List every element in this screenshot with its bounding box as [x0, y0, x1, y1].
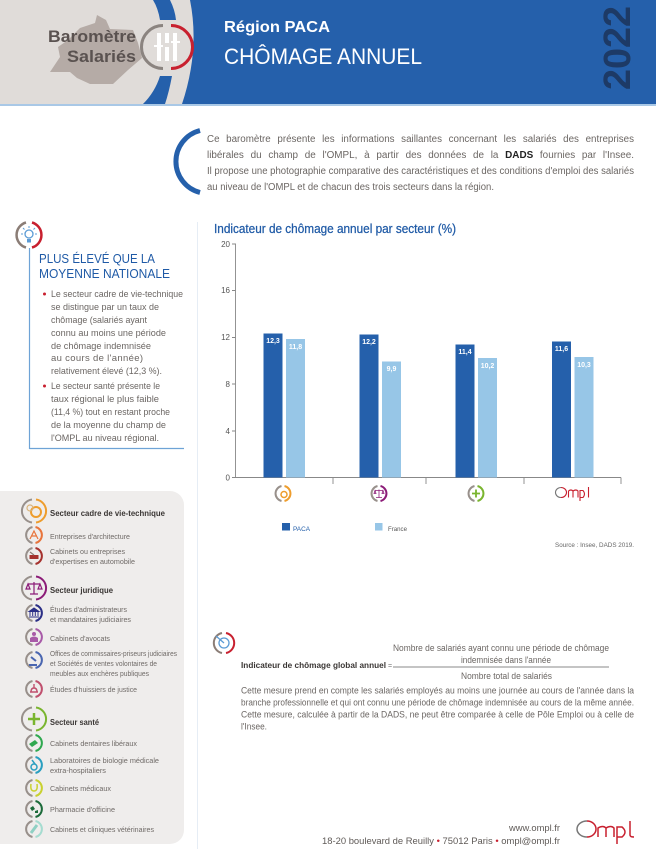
intro arc	[176, 130, 200, 192]
formula: Indicateur de chômage global annuel	[241, 661, 386, 670]
callout bullet list: relativement élevé (12,3 %).	[51, 366, 162, 377]
axes: 0	[226, 474, 231, 482]
icon: light bulb	[17, 222, 41, 248]
formula	[241, 643, 609, 681]
callout bullet list: de chômage indemnisée	[51, 341, 151, 352]
item: laboratoires: extra-hospitaliers	[50, 768, 107, 775]
intro text	[207, 134, 634, 193]
chart legend: PACA	[293, 527, 310, 533]
sector heading: cadre de vie-technique	[22, 500, 165, 522]
callout heading: MOYENNE NATIONALE	[39, 266, 170, 281]
chart legend: France	[388, 527, 408, 533]
item: laboratoires	[26, 757, 159, 775]
axes	[221, 240, 621, 484]
item: commissaires-priseurs	[26, 651, 177, 678]
sector heading: juridique: Secteur juridique	[50, 585, 113, 595]
item: laboratoires: Laboratoires de biologie médicale	[50, 758, 159, 765]
bars: santé: 10,2	[481, 363, 494, 370]
formula: indemnisée dans l'année	[461, 655, 551, 665]
icon: cadre de vie-technique axis	[276, 486, 290, 501]
callout bullet list: de la moyenne du champ de	[51, 420, 166, 431]
item: commissaires-priseurs: meubles aux enchères publiques	[50, 671, 149, 678]
chart legend	[282, 523, 408, 533]
footer contact: www.ompl.fr	[508, 823, 560, 834]
bars: juridique: 12,2	[362, 339, 376, 346]
item: dentaires: Cabinets dentaires libéraux	[50, 741, 138, 748]
axes: 16	[221, 286, 231, 295]
axes: 4	[226, 427, 231, 436]
item: administrateurs et mandataires judiciaires: et mandataires judiciaires	[50, 617, 132, 624]
item: pharmacie	[26, 801, 115, 817]
intro text: Ce baromètre présente les informations saillantes concernant les salariés des entreprises	[207, 134, 634, 145]
item: administrateurs et mandataires judiciaires	[26, 605, 132, 624]
callout bullet list: se distingue par un taux de	[51, 302, 159, 313]
definition text: Cette mesure prend en compte les salariés employés au moins une journée au cours de l'année dans la	[241, 686, 634, 696]
definition text	[241, 686, 634, 732]
intro text: au niveau de l'OMPL et de chacun des trois secteurs dans la région.	[207, 182, 494, 193]
icon: target	[214, 633, 234, 653]
item: vétérinaires	[26, 821, 154, 837]
title: chômage annuel: CHÔMAGE ANNUEL	[224, 44, 422, 69]
intro text: libérales du champ de l'OMPL, à partir des données de la DADS fournies par l'Insee.	[207, 150, 634, 161]
item: commissaires-priseurs: Offices de commissaires-priseurs judiciaires	[50, 651, 177, 658]
bars: juridique	[360, 334, 401, 478]
bars: cadre de vie-technique: 12,3	[266, 338, 280, 345]
sector heading: cadre de vie-technique: Secteur cadre de vie-technique	[50, 508, 165, 518]
bars: juridique: 9,9	[387, 366, 396, 373]
sector heading: juridique	[22, 576, 113, 600]
callout bullet list: chômage (salariés ayant	[51, 315, 147, 326]
item: avocats: Cabinets d'avocats	[50, 636, 110, 643]
item: vétérinaires: Cabinets et cliniques vétérinaires	[50, 827, 154, 834]
item: architecture	[26, 527, 130, 543]
sector heading: santé: Secteur santé	[50, 717, 99, 727]
item: médicaux	[26, 780, 112, 796]
callout bullet list: l'OMPL au niveau régional.	[51, 433, 159, 444]
logo: Baromètre Salariés: Salariés	[67, 48, 136, 66]
callout bullet list: taux régional le plus faible	[51, 394, 159, 405]
axes: 20	[221, 240, 231, 249]
bars: santé	[456, 344, 497, 478]
item: administrateurs et mandataires judiciaires: Études d'administrateurs	[50, 605, 127, 614]
callout bullet list: Le secteur santé présente le	[51, 381, 160, 392]
bars: OMPL: 10,3	[577, 362, 591, 369]
icon: juridique axis	[372, 486, 386, 501]
footer contact	[322, 823, 560, 847]
formula: Nombre de salariés ayant connu une période de chômage	[393, 643, 609, 653]
icon: santé axis	[469, 486, 483, 501]
bars: santé: 11,4	[458, 349, 472, 356]
logo: Baromètre Salariés	[48, 15, 192, 84]
item: expertises en automobile	[26, 548, 135, 566]
item: huissiers: Études d'huissiers de justice	[50, 685, 137, 694]
logo: Baromètre Salariés: Baromètre	[48, 28, 136, 46]
header banner	[0, 0, 656, 106]
item: commissaires-priseurs: et Sociétés de ventes volontaires de	[50, 661, 157, 668]
item: expertises en automobile: Cabinets ou entreprises	[50, 549, 126, 556]
title: region: Région PACA	[224, 19, 330, 36]
item: avocats	[26, 629, 110, 645]
definition block	[214, 633, 634, 732]
item: huissiers	[26, 681, 137, 697]
item: dentaires	[26, 735, 138, 751]
source: Source : Insee, DADS 2019.	[555, 542, 634, 549]
callout bullet list: au cours de l'année)	[51, 353, 143, 364]
logo: Ompl axis	[556, 487, 588, 501]
item: pharmacie: Pharmacie d'officine	[50, 807, 115, 814]
callout bullet list: (11,4 %) tout en restant proche	[51, 407, 170, 418]
bars: cadre de vie-technique: 11,8	[289, 344, 302, 351]
callout bullet list: Le secteur cadre de vie-technique	[51, 289, 183, 300]
bars: cadre de vie-technique	[264, 334, 305, 478]
chart heading: Indicateur de chômage annuel par secteur (%)	[214, 222, 456, 236]
axes: 12	[221, 333, 231, 342]
item: médicaux: Cabinets médicaux	[50, 786, 112, 793]
bars: OMPL	[552, 342, 594, 478]
footer contact: 18-20 boulevard de Reuilly • 75012 Paris • ompl@ompl.fr	[322, 836, 560, 847]
callout heading	[39, 251, 170, 281]
panel: plus élevé que la moyenne nationale	[17, 222, 184, 448]
sector heading: santé	[22, 708, 99, 730]
axes: 8	[226, 380, 231, 389]
bars: OMPL: 11,6	[555, 346, 568, 353]
callout bullet list	[43, 289, 183, 444]
formula: =	[388, 663, 392, 670]
definition text: l'Insee.	[241, 722, 267, 732]
callout bullet list: connu au moins une période	[51, 328, 166, 339]
logo: Ompl footer	[577, 821, 634, 844]
formula: Nombre total de salariés	[461, 671, 552, 681]
definition text: Cette mesure, calculée à partir de la DADS, ne peut être comparée à celle de Pôle Emploi ou à celle de	[241, 710, 634, 720]
item: architecture: Entreprises d'architecture	[50, 534, 130, 541]
panel: sectors legend	[0, 491, 184, 844]
callout heading: PLUS ÉLEVÉ QUE LA	[39, 251, 155, 266]
intro text: Il propose une photographie comparative des caractéristiques et des conditions d'emploi des salariés	[207, 166, 634, 177]
bar chart	[221, 240, 621, 501]
item: expertises en automobile: d'expertises en automobile	[50, 559, 135, 566]
year: 2022	[597, 6, 639, 90]
